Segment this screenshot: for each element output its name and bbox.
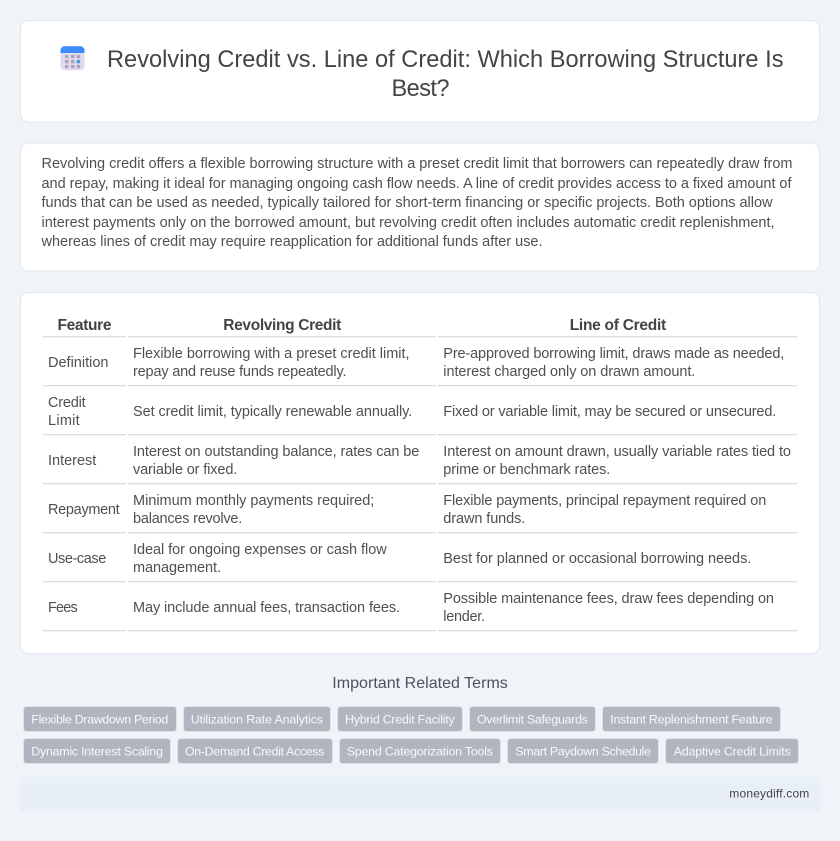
row: definition <box>43 346 797 386</box>
row: definition: Flexible borrowing with a preset credit limit, <box>133 346 410 362</box>
panel: introduction text <box>20 143 820 271</box>
intro paragraph: funds that can be used as needed, typically tailored for short-term financing or specific projects. Both options allow <box>42 195 773 211</box>
row: fees <box>43 591 797 631</box>
chip: on-demand credit access <box>178 738 332 764</box>
row: interest <box>43 444 797 484</box>
row: repayment: Minimum monthly payments required; <box>133 493 374 509</box>
row: fees: May include annual fees, transaction fees. <box>133 600 400 616</box>
intro paragraph: whereas lines of credit may require reapplication for additional funds after use. <box>40 234 542 250</box>
panel: related term chips <box>24 706 798 764</box>
row: credit limit: Fixed or variable limit, may be secured or unsecured. <box>443 404 776 420</box>
row: interest: variable or fixed. <box>133 462 237 478</box>
chip: overlimit safeguards <box>470 706 596 732</box>
chip: dynamic interest scaling <box>24 738 170 764</box>
row: credit limit <box>43 395 797 435</box>
chip: flexible drawdown period <box>24 706 176 732</box>
row: credit limit: Credit <box>48 395 86 411</box>
row: use-case <box>43 542 797 582</box>
chip: on-demand credit access: On-Demand Credit Access <box>185 744 324 758</box>
row: use-case: management. <box>133 560 221 576</box>
intro paragraph: Revolving credit offers a flexible borrowing structure with a preset credit limit that borrowers can repeatedly draw from <box>42 156 792 172</box>
intro paragraph: and repay, making it ideal for managing ongoing cash flow needs. A line of credit provides access to a fixed amount of <box>42 176 792 192</box>
row: definition: Pre-approved borrowing limit, draws made as needed, <box>443 346 784 362</box>
row: credit limit: Set credit limit, typically renewable annually. <box>133 404 412 420</box>
row: interest: Interest on amount drawn, usually variable rates tied to <box>443 444 791 460</box>
row: repayment: Repayment <box>48 502 120 518</box>
table header row <box>43 317 797 337</box>
chip: instant replenishment feature: Instant Replenishment Feature <box>610 712 773 726</box>
table header row: Feature <box>58 317 112 334</box>
chip: hybrid credit facility <box>338 706 462 732</box>
title <box>107 47 784 102</box>
chip: hybrid credit facility: Hybrid Credit Facility <box>345 712 455 726</box>
table header row: Line of Credit <box>570 317 666 334</box>
panel: comparison table <box>20 292 820 654</box>
row: interest: prime or benchmark rates. <box>443 462 610 478</box>
heading: important related terms: Important Related Terms <box>332 675 508 692</box>
panel: header <box>20 20 820 122</box>
chip: spend categorization tools: Spend Categorization Tools <box>347 744 493 758</box>
table header row: Revolving Credit <box>223 317 341 334</box>
row: repayment: balances revolve. <box>133 511 242 527</box>
row: interest: Interest on outstanding balance, rates can be <box>133 444 419 460</box>
title: Best? <box>392 76 450 102</box>
row: use-case: Ideal for ongoing expenses or cash flow <box>133 542 387 558</box>
footer bar <box>20 777 820 811</box>
chip: overlimit safeguards: Overlimit Safeguards <box>477 712 588 726</box>
row: repayment <box>43 493 797 533</box>
chip: utilization rate analytics: Utilization Rate Analytics <box>191 712 323 726</box>
row: fees: Possible maintenance fees, draw fees depending on <box>443 591 774 607</box>
chip: utilization rate analytics <box>184 706 330 732</box>
row: use-case: Best for planned or occasional borrowing needs. <box>443 551 751 567</box>
chip: spend categorization tools <box>340 738 500 764</box>
chip: smart paydown schedule <box>508 738 658 764</box>
chip: dynamic interest scaling: Dynamic Interest Scaling <box>31 744 163 758</box>
row: interest: Interest <box>48 453 96 469</box>
row: credit limit: Limit <box>48 413 80 429</box>
chip: instant replenishment feature <box>602 706 780 732</box>
row: definition: repay and reuse funds repeatedly. <box>133 364 346 380</box>
row: fees: lender. <box>443 609 485 625</box>
intro paragraph: interest payments only on the borrowed amount, but revolving credit often includes automatic credit replenishment, <box>42 215 774 231</box>
chip: smart paydown schedule: Smart Paydown Schedule <box>515 744 651 758</box>
chip: flexible drawdown period: Flexible Drawdown Period <box>31 712 168 726</box>
chip: adaptive credit limits <box>666 738 798 764</box>
footer source text: moneydiff.com <box>729 787 809 801</box>
row: use-case: Use-case <box>48 551 106 567</box>
icon: calendar <box>60 46 84 70</box>
row: definition: Definition <box>48 355 108 371</box>
title: Revolving Credit vs. Line of Credit: Which Borrowing Structure Is <box>107 47 784 73</box>
row: definition: interest charged only on drawn amount. <box>443 364 695 380</box>
row: repayment: drawn funds. <box>443 511 525 527</box>
chip: adaptive credit limits: Adaptive Credit Limits <box>674 744 791 758</box>
row: fees: Fees <box>48 600 78 616</box>
row: repayment: Flexible payments, principal repayment required on <box>443 493 766 509</box>
intro paragraph <box>40 156 792 250</box>
